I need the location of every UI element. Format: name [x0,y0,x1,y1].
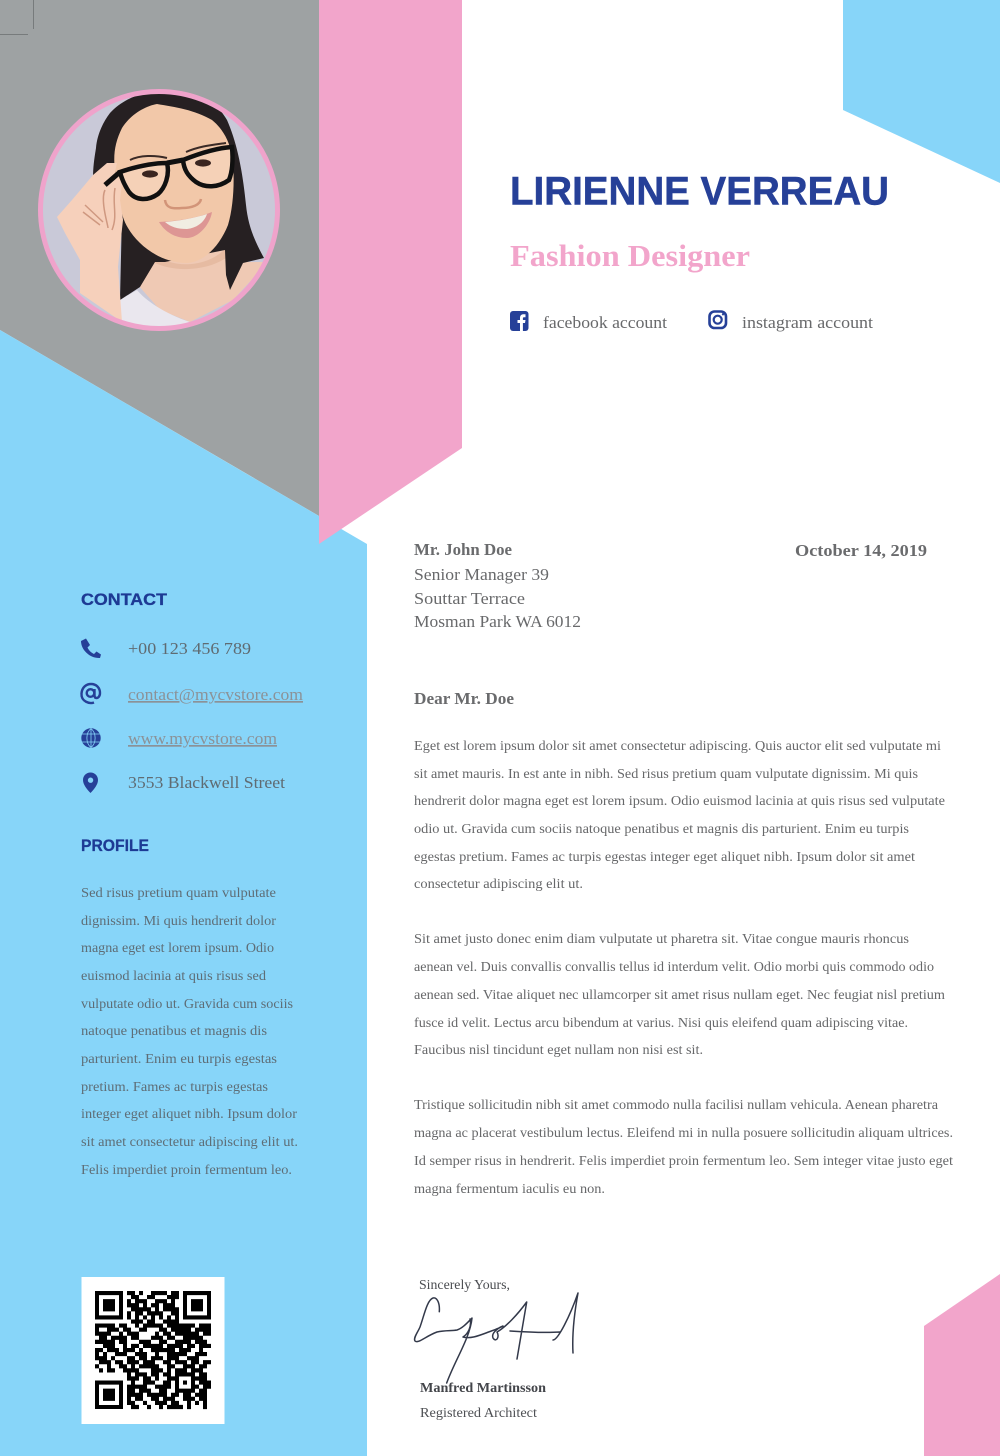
recipient address: Mr. John Doe [414,540,512,559]
panel: blue sidebar [0,330,367,1456]
text: profile paragraph: sit amet consectetur adipiscing elit ut. [81,1134,298,1149]
text: letter paragraph 2: aenean sed. Vitae aliquet nec ullamcorper sit amet risus nullam eget. Nec feugiat nisl pretium [414,987,946,1002]
text: signatory role: Registered Architect [420,1405,537,1420]
text: letter paragraph 1 [414,738,945,891]
title: name: LIRIENNE VERREAU [510,170,889,214]
text: instagram account: instagram account [742,313,873,332]
text: signatory name: Manfred Martinsson [420,1381,546,1396]
text: profile paragraph [81,885,298,1177]
text: letter paragraph 3: Tristique sollicitudin nibh sit amet commodo nulla facilisi nullam vehicula. Aenean pharetra [414,1097,938,1112]
text: letter paragraph 1: sit amet mauris. In est ante in nibh. Sed risus pretium quam vulputate dignissim. Mi quis [414,766,918,781]
text: letter paragraph 1: egestas pretium. Fames ac turpis egestas integer eget aliquet nibh. Ipsum dolor sit amet [414,849,915,864]
text: profile paragraph: integer eget aliquet nibh. Ipsum dolor [81,1106,298,1121]
icon: at sign [81,684,100,703]
recipient address: Mosman Park WA 6012 [414,612,581,631]
decoration: top right blue shape [843,0,1000,183]
heading: profile: PROFILE [81,837,149,855]
icon: location pin [83,772,98,793]
date: October 14, 2019 [795,541,927,560]
panel: pink ribbon [319,0,462,544]
text: profile paragraph: natoque penatibus et magnis dis [81,1023,267,1038]
subtitle: job title: Fashion Designer [510,238,750,273]
text: facebook account: facebook account [543,313,667,332]
icon: globe [81,728,101,748]
text: profile paragraph: magna eget est lorem ipsum. Odio [81,940,274,955]
text: letter paragraph 2: Sit amet justo donec enim diam vulputate ut pharetra sit. Vitae congue mauris rhoncus [414,931,909,946]
text: profile paragraph: euismod lacinia at quis risus sed [81,968,266,983]
recipient address [414,540,581,631]
salutation: Dear Mr. Doe [414,689,514,708]
decoration: bottom right pink shape [924,1274,1000,1456]
text: letter paragraph 1: hendrerit dolor magna eget est lorem ipsum. Odio euismod lacinia at quis risus sed vulputate [414,793,945,808]
text: letter paragraph 1: Eget est lorem ipsum dolor sit amet consectetur adipiscing. Quis auctor elit sed vulputate mi [414,738,941,753]
text: profile paragraph: pretium. Fames ac turpis egestas [81,1079,268,1094]
recipient address: Souttar Terrace [414,589,525,608]
text: profile paragraph: vulputate odio ut. Gravida cum sociis [81,996,293,1011]
text: letter paragraph 1: consectetur adipiscing elit ut. [414,876,583,891]
text: letter paragraph 2: Faucibus nisl tincidunt eget nullam non nisi est sit. [414,1042,703,1057]
icon: instagram [710,312,726,328]
text: letter paragraph 1: odio ut. Gravida cum sociis natoque penatibus et magnis dis parturient. Enim eu turpis [414,821,909,836]
signature [415,1293,578,1383]
text: website link: www.mycvstore.com [128,729,277,748]
QR code [82,1277,224,1424]
crop marks [0,0,34,34]
icon: phone [81,638,101,658]
text: letter paragraph 2 [414,931,946,1057]
text: email link: contact@mycvstore.com [128,685,303,704]
text: profile paragraph: dignissim. Mi quis hendrerit dolor [81,913,277,928]
text: letter paragraph 2: fusce id velit. Lectus arcu bibendum at varius. Nisi quis eleifend quam adipiscing vitae. [414,1015,908,1030]
text: letter paragraph 3: Id semper risus in hendrerit. Felis imperdiet proin fermentum leo. Sem integer vitae justo eget [414,1153,953,1168]
text: profile paragraph: Felis imperdiet proin fermentum leo. [81,1162,292,1177]
portrait photo [38,88,280,334]
panel: gray header block [0,0,319,516]
recipient address: Senior Manager 39 [414,565,549,584]
text: letter paragraph 3: magna fermentum iaculis eu non. [414,1181,605,1196]
text: profile paragraph: parturient. Enim eu turpis egestas [81,1051,277,1066]
icon: facebook [510,311,528,331]
text: phone: +00 123 456 789 [128,639,251,658]
text: letter paragraph 3: magna ac placerat vestibulum lectus. Eleifend mi in nulla posuere sollicitudin aliquam ultrices. [414,1125,953,1140]
text: address: 3553 Blackwell Street [128,773,285,792]
heading: contact: CONTACT [81,591,167,609]
text: profile paragraph: Sed risus pretium quam vulputate [81,885,276,900]
text: letter paragraph 2: aenean vel. Duis convallis convallis tellus id interdum velit. Odio morbi quis commodo odio [414,959,934,974]
text: letter paragraph 3 [414,1097,953,1196]
text: closing: Sincerely Yours, [419,1277,510,1292]
